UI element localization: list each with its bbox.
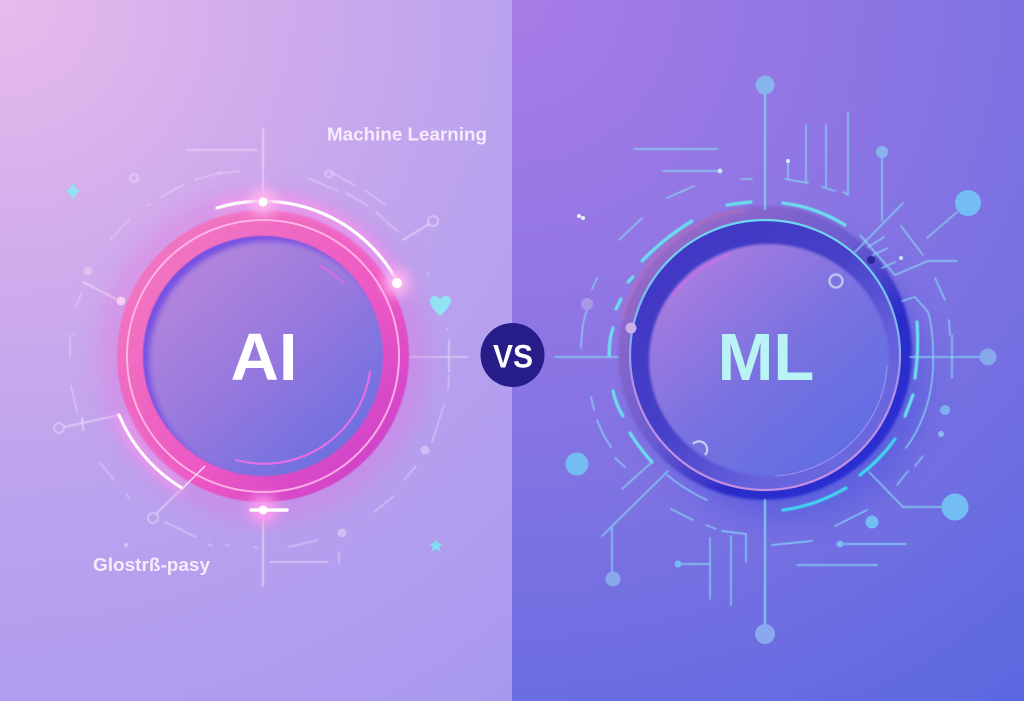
inner small ring (830, 274, 842, 288)
bottom flare (249, 496, 287, 524)
top white arc (217, 201, 398, 283)
right connector to VS (410, 340, 468, 372)
top and bottom vertical connectors (764, 91, 766, 626)
right dashes (897, 226, 950, 485)
bottom vertical connector (262, 510, 264, 586)
AI title: AI (230, 320, 298, 395)
background: left panel (0, 0, 512, 701)
top flare (250, 189, 276, 215)
bottom tick (338, 552, 340, 564)
top horizontal connector (187, 149, 257, 151)
faint inner line (775, 365, 887, 476)
panel: AI circuit decoration (54, 128, 468, 586)
icons: ML nodes (566, 76, 996, 644)
disc rim shadow (141, 233, 387, 479)
badge text: VS (493, 338, 533, 374)
badge circle (480, 323, 544, 387)
lower-right node line (869, 472, 942, 507)
panel: ML cyan arc segments (609, 202, 918, 510)
icon: cyan sparkle (66, 182, 80, 200)
bottom horizontal connector (270, 561, 328, 563)
lower-left white arc (119, 415, 182, 488)
right outer path (902, 297, 933, 448)
thick pink ring (130, 223, 396, 489)
inner arc upper right (320, 266, 344, 283)
label: Glostrß-pasy: Glostrß-pasy (93, 555, 210, 575)
mid band (630, 220, 900, 490)
lower dashes (671, 509, 746, 605)
icon: cyan star (429, 539, 443, 552)
dashed orbit (70, 171, 449, 548)
upper-right node (403, 224, 429, 240)
upper-left node (83, 282, 120, 301)
panel: ML ring (618, 206, 927, 520)
node rings (54, 170, 438, 523)
right horizontal connector (910, 335, 982, 378)
lower-left arc glow (119, 415, 182, 488)
ML title: ML (718, 320, 814, 395)
tangled connectors (868, 237, 895, 268)
right bent line (860, 235, 957, 275)
lower-left lines (602, 462, 707, 573)
thin highlight line (127, 220, 399, 492)
upper-left lines (634, 149, 752, 179)
upper bars (785, 112, 848, 195)
inner disc (149, 241, 389, 481)
bottom-left node (157, 466, 205, 513)
outer warm arc (622, 210, 745, 320)
inner pink arc (673, 254, 730, 295)
left dashes (591, 186, 694, 467)
upper-right node lines (855, 152, 957, 252)
left lines (555, 310, 618, 357)
lower-right dashes (772, 510, 906, 565)
thin ring line (630, 220, 900, 490)
AI ring (113, 189, 413, 524)
label: Machine Learning: Machine Learning (327, 124, 487, 144)
VS badge (480, 323, 544, 387)
inner disc (649, 244, 889, 476)
outer band (618, 206, 912, 500)
ring glow (113, 206, 413, 506)
top vertical connector (262, 128, 264, 202)
ring shadow (643, 236, 927, 520)
top white arc glow (217, 201, 398, 283)
icons: AI filled dots (84, 266, 430, 548)
connector over ring (182, 466, 205, 489)
icon: cyan heart (430, 296, 451, 316)
background: right panel (512, 0, 1024, 701)
panel: ML circuit decoration (555, 91, 982, 626)
right flare (384, 270, 410, 296)
inner C ring (693, 441, 707, 455)
lower-left node (64, 415, 119, 430)
inner arc lower right (236, 372, 370, 464)
